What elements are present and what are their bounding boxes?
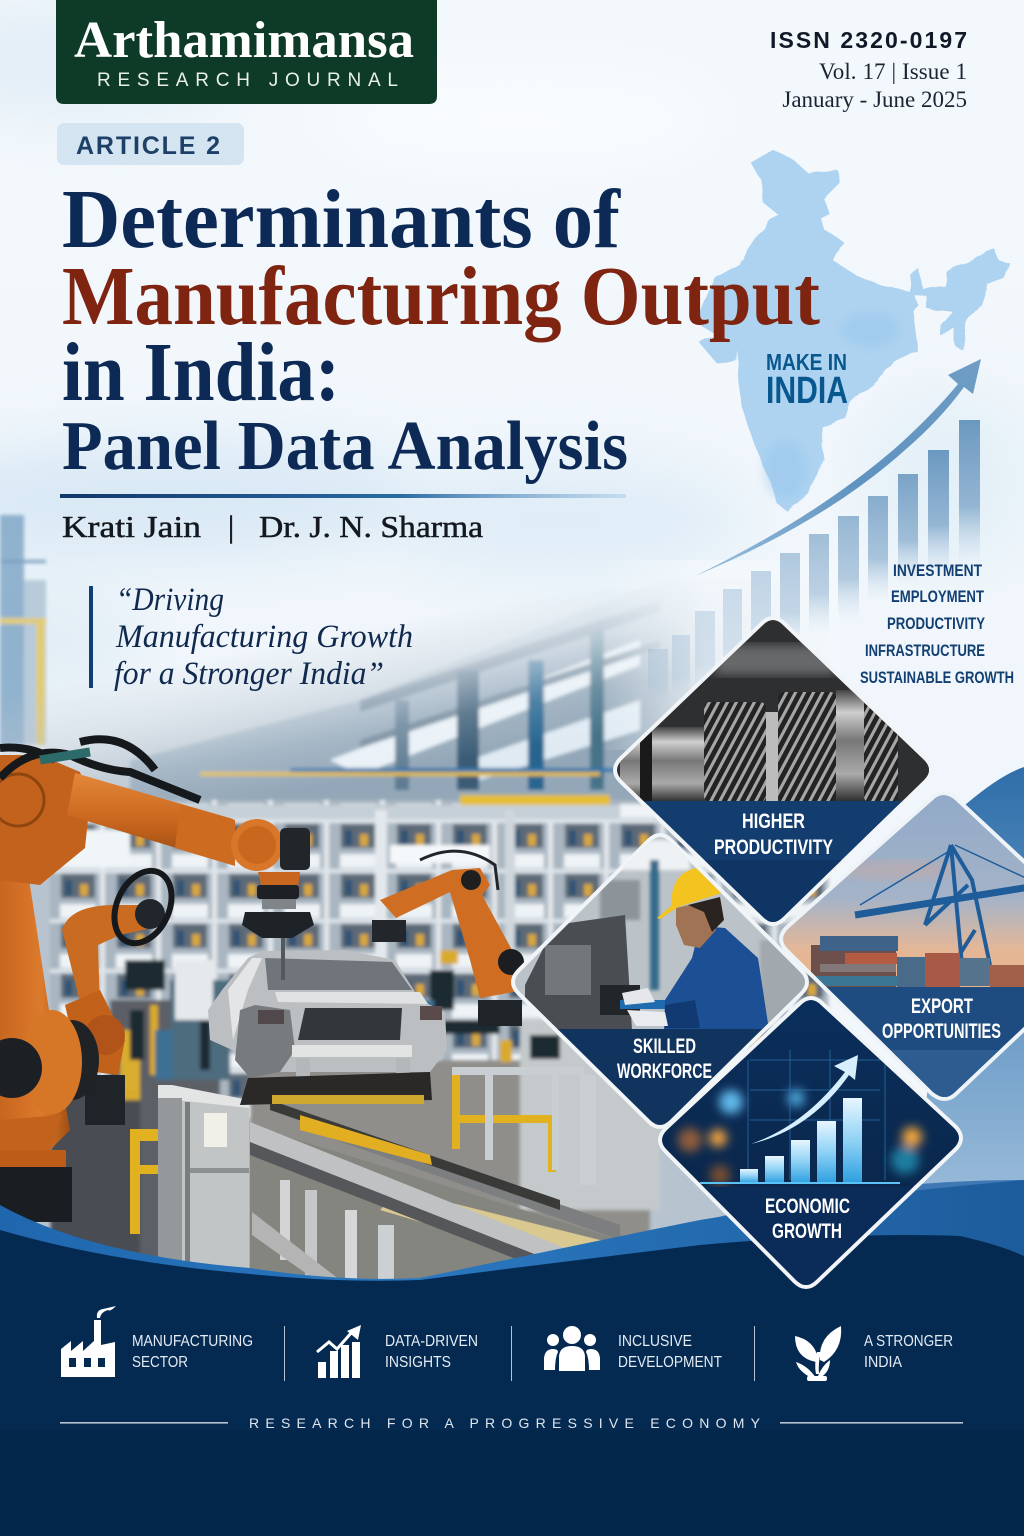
development label: DEVELOPMENT bbox=[618, 1354, 722, 1371]
quote: Manufacturing Growth bbox=[115, 619, 413, 655]
diamond: higher productivity bbox=[610, 610, 940, 931]
growth label bbox=[765, 1195, 850, 1243]
manufacturing label: SECTOR bbox=[132, 1354, 188, 1371]
keyword list: EMPLOYMENT bbox=[891, 587, 984, 606]
title bbox=[62, 173, 820, 485]
issue details: Vol. 17 | Issue 1 bbox=[819, 59, 967, 84]
icon: plant bbox=[795, 1326, 841, 1381]
quote bbox=[89, 582, 413, 692]
growth bars bbox=[648, 420, 980, 709]
journal masthead bbox=[56, 0, 437, 104]
journal masthead: RESEARCH JOURNAL bbox=[97, 70, 398, 91]
make in india label: INDIA bbox=[766, 370, 848, 412]
diamond: export opportunities bbox=[770, 785, 1024, 1110]
article badge bbox=[57, 123, 244, 165]
India map bbox=[697, 151, 1008, 510]
productivity label: HIGHER bbox=[742, 810, 805, 833]
india label bbox=[864, 1333, 953, 1371]
authors bbox=[62, 509, 483, 544]
authors: Krati Jain bbox=[62, 509, 202, 544]
workforce label: SKILLED bbox=[633, 1035, 696, 1058]
manufacturing label: MANUFACTURING bbox=[132, 1333, 253, 1350]
issue details: January - June 2025 bbox=[782, 87, 967, 112]
data label bbox=[385, 1333, 478, 1371]
authors: Dr. J. N. Sharma bbox=[259, 509, 483, 544]
growth label: ECONOMIC bbox=[765, 1195, 850, 1218]
main robot arm bbox=[0, 739, 314, 1222]
make in india label: MAKE IN bbox=[766, 349, 847, 375]
authors: | bbox=[228, 509, 234, 544]
diamond: economic growth bbox=[650, 990, 970, 1297]
productivity label bbox=[714, 810, 833, 859]
journal masthead: Arthamimansa bbox=[74, 12, 414, 69]
manufacturing label bbox=[132, 1333, 253, 1371]
quote: “Driving bbox=[116, 582, 224, 618]
right side blue swoosh bbox=[900, 767, 1024, 1300]
diamond: skilled workforce bbox=[505, 828, 815, 1134]
worker bbox=[622, 868, 769, 1030]
issue details bbox=[770, 27, 967, 112]
keyword list: INFRASTRUCTURE bbox=[865, 641, 985, 660]
development label bbox=[618, 1333, 722, 1371]
workforce label bbox=[617, 1035, 712, 1083]
car body on assembly line bbox=[208, 950, 447, 1105]
workforce label: WORKFORCE bbox=[617, 1060, 712, 1083]
title rule bbox=[60, 494, 626, 498]
factory scene photo bbox=[0, 560, 840, 1290]
issue details: ISSN 2320-0197 bbox=[770, 27, 967, 53]
export label bbox=[882, 995, 1001, 1043]
icon: people bbox=[544, 1326, 600, 1371]
growth arrow bbox=[695, 359, 981, 576]
data label: INSIGHTS bbox=[385, 1354, 451, 1371]
india label: INDIA bbox=[864, 1354, 902, 1371]
background robot arm left bbox=[62, 899, 165, 1125]
keyword list: PRODUCTIVITY bbox=[887, 614, 986, 633]
left scaffolding bbox=[0, 515, 46, 745]
export label: EXPORT bbox=[911, 995, 973, 1018]
data label: DATA-DRIVEN bbox=[385, 1333, 478, 1350]
keyword list: INVESTMENT bbox=[893, 561, 982, 580]
title: Determinants of bbox=[62, 173, 621, 266]
keyword list bbox=[860, 561, 1014, 687]
productivity label: PRODUCTIVITY bbox=[714, 836, 833, 859]
icon: factory bbox=[61, 1306, 116, 1377]
bottom wave bbox=[0, 1180, 1024, 1536]
equipment cabinet bbox=[158, 1085, 249, 1270]
development label: INCLUSIVE bbox=[618, 1333, 692, 1350]
icon: chart bbox=[317, 1325, 361, 1378]
article badge: ARTICLE 2 bbox=[76, 132, 220, 160]
quote: for a Stronger India” bbox=[114, 656, 384, 692]
india label: A STRONGER bbox=[864, 1333, 953, 1350]
background robot arm right bbox=[372, 851, 525, 1026]
title: in India: bbox=[62, 326, 340, 419]
title: Manufacturing Output bbox=[62, 250, 820, 343]
make in india label bbox=[766, 349, 848, 412]
growth label: GROWTH bbox=[772, 1220, 842, 1243]
tagline: RESEARCH FOR A PROGRESSIVE ECONOMY bbox=[249, 1415, 761, 1431]
conveyor and yellow frames bbox=[130, 1067, 620, 1290]
title: Panel Data Analysis bbox=[62, 408, 628, 485]
